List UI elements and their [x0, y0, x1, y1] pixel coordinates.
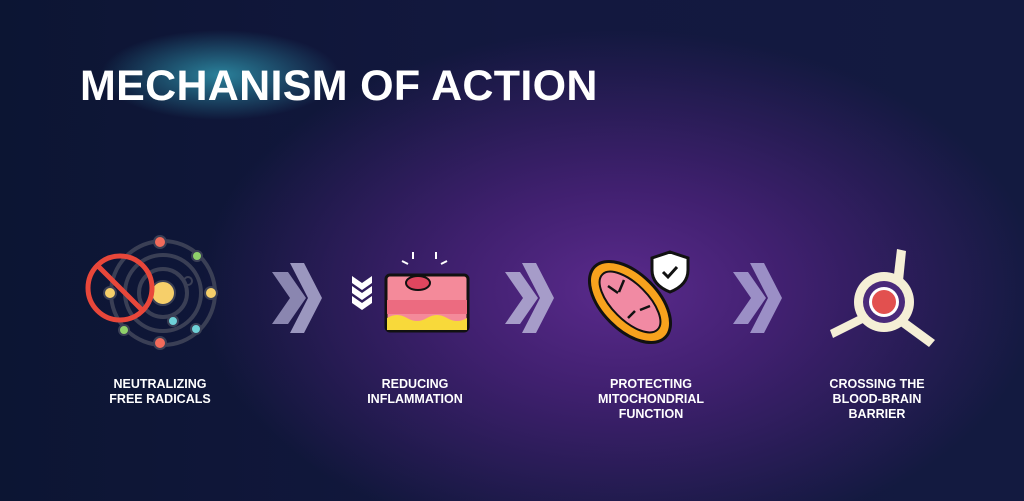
- label 1: [109, 377, 211, 406]
- arrow 3: [733, 263, 782, 333]
- label 1: NEUTRALIZING: [113, 377, 207, 391]
- label 2: INFLAMMATION: [367, 392, 463, 406]
- label 3: [598, 377, 704, 421]
- label 4: BARRIER: [849, 407, 905, 421]
- label 1: FREE RADICALS: [109, 392, 211, 406]
- label 3: FUNCTION: [619, 407, 683, 421]
- label 4: BLOOD-BRAIN: [833, 392, 921, 406]
- icon: free radicals atom: [88, 236, 217, 349]
- icon: mitochondria with shield: [575, 247, 688, 357]
- label 2: REDUCING: [382, 377, 448, 391]
- label 4: CROSSING THE: [829, 377, 925, 391]
- icon: blood-brain barrier: [830, 249, 935, 347]
- arrow 2: [505, 263, 554, 333]
- label 4: [829, 377, 925, 421]
- label 3: MITOCHONDRIAL: [598, 392, 704, 406]
- label 3: PROTECTING: [610, 377, 692, 391]
- arrow 1: [272, 263, 322, 333]
- icon: inflammation: [352, 252, 468, 331]
- title: MECHANISM OF ACTION: [80, 62, 598, 110]
- label 2: [367, 377, 463, 406]
